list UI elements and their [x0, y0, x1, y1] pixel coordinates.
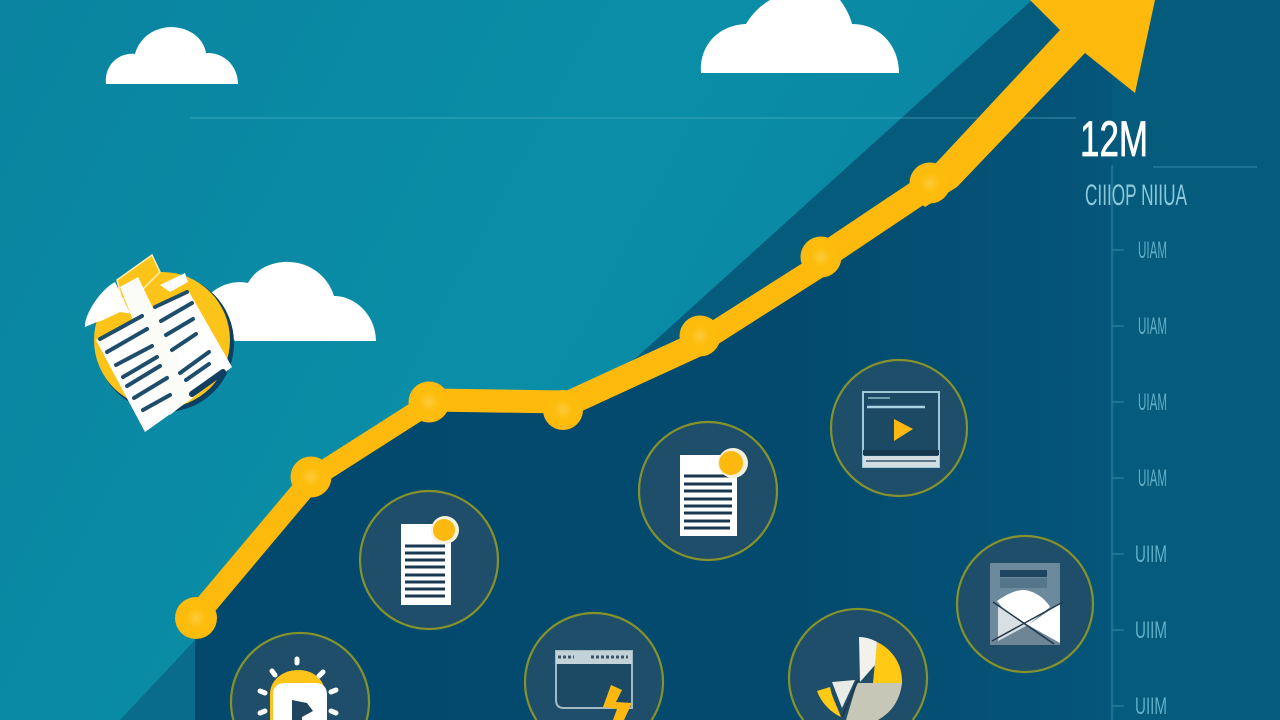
icon circle: document with coin (centre) — [639, 422, 777, 560]
top grid line — [190, 117, 1076, 119]
axis labels — [1135, 237, 1167, 720]
icon circle: browser window with bolt — [525, 613, 663, 720]
text: UIAM — [1138, 237, 1167, 264]
arrow shaft and head — [905, 0, 1155, 207]
page — [96, 290, 232, 432]
icon circle: light bulb — [231, 633, 369, 720]
axis labels: UIIM — [1135, 617, 1167, 644]
data points — [175, 162, 950, 639]
icon circle: envelope — [957, 536, 1093, 672]
star behind page — [117, 255, 160, 300]
axis labels: UIIM — [1135, 693, 1167, 720]
growth line with arrow — [175, 0, 1155, 639]
folded flap — [85, 282, 130, 327]
dark area under growth line — [195, 40, 1112, 720]
cloud top left — [106, 27, 238, 84]
icon: document badge on yellow circle — [85, 255, 234, 432]
icon circle: document with coin (left) — [360, 491, 498, 629]
text: UIAM — [1138, 389, 1167, 416]
lower-left mid-tone triangle — [120, 640, 195, 720]
cloud top centre — [701, 0, 899, 73]
icon circle: video player — [831, 360, 967, 496]
text: UIAM — [1138, 313, 1167, 340]
cloud middle left — [205, 262, 376, 341]
headline value: 12M — [1080, 111, 1148, 167]
text: UIAM — [1138, 465, 1167, 492]
axis — [1112, 165, 1257, 720]
bulb rays — [260, 659, 336, 713]
icon circle: pie chart — [789, 609, 927, 720]
page text lines — [100, 292, 209, 410]
axis title: CIIIOP NIIUA — [1085, 179, 1187, 212]
axis labels: UIIM — [1135, 541, 1167, 568]
